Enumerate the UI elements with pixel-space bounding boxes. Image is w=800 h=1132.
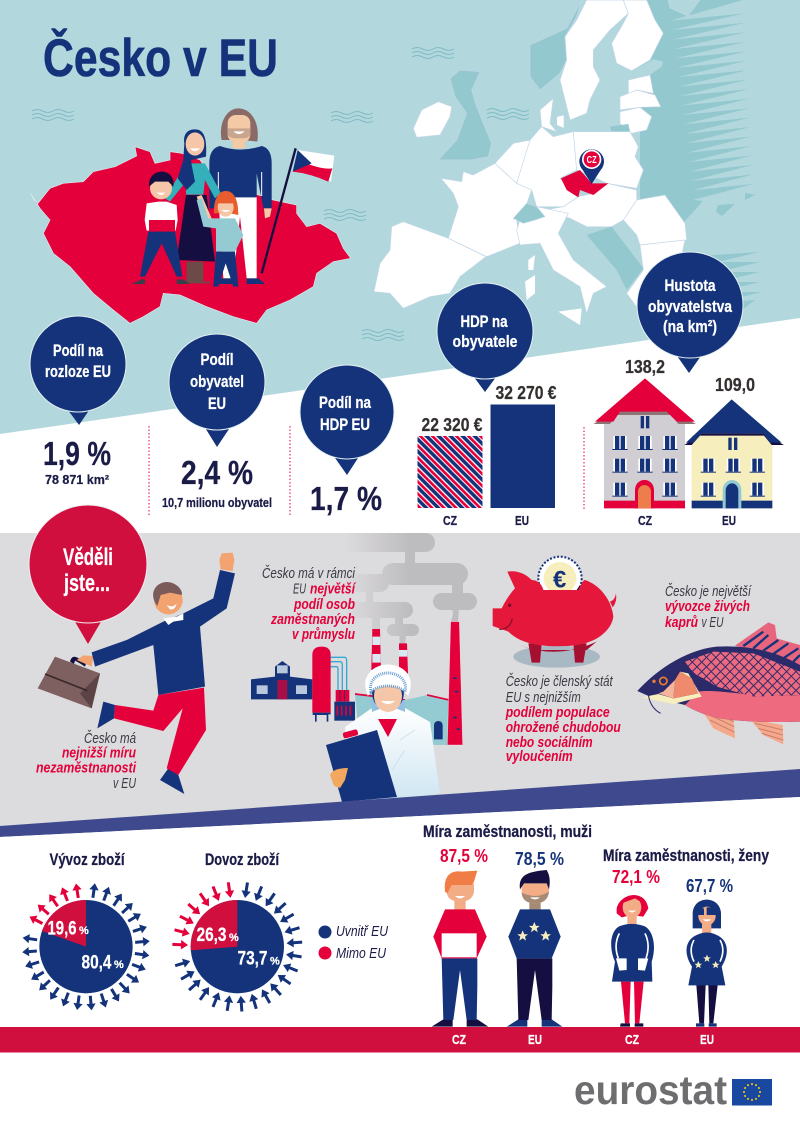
pie chart: import xyxy=(172,882,302,1012)
shoes xyxy=(97,702,115,728)
body xyxy=(493,571,613,646)
bar CZ xyxy=(418,436,482,508)
coin: € xyxy=(553,567,566,594)
bar label CZ men: CZ xyxy=(452,1032,466,1047)
Czechia shape xyxy=(31,147,351,323)
callout: share of EU area xyxy=(30,316,126,425)
coat xyxy=(345,708,440,800)
houses chart xyxy=(593,378,784,508)
import labels: 73,7 xyxy=(238,948,268,970)
map of Europe xyxy=(374,0,687,325)
Finland xyxy=(612,0,663,71)
text: poverty: podílem populace xyxy=(505,705,610,721)
France xyxy=(441,163,532,257)
value: area 1,9 %: 1,9 % xyxy=(43,435,111,472)
text: industry: Česko má v rámci xyxy=(262,565,356,582)
red arrows out xyxy=(27,883,83,928)
callout: population density xyxy=(637,252,743,373)
export labels: % xyxy=(79,925,89,937)
heading: export: Vývoz zboží xyxy=(50,851,126,869)
Gulf of Finland xyxy=(628,59,663,80)
house CZ xyxy=(593,378,696,508)
value 109,0: 109,0 xyxy=(715,375,755,395)
Germany xyxy=(517,127,578,207)
pie slices xyxy=(39,900,133,993)
Norway xyxy=(530,0,582,90)
map pin CZ xyxy=(579,149,604,184)
callout: GDP per capita xyxy=(437,283,533,392)
value: 78 871 km2: 78 871 km² xyxy=(45,472,110,487)
Switzerland xyxy=(513,203,545,223)
mother xyxy=(165,129,221,283)
value men CZ: 87,5 % xyxy=(440,845,488,866)
dotted dividers xyxy=(149,426,586,1022)
text: poverty: nebo sociálním xyxy=(506,735,593,751)
Italy xyxy=(517,207,607,313)
label EU density: EU xyxy=(722,513,736,528)
text: carp: kaprů xyxy=(665,615,698,631)
hand xyxy=(330,768,348,788)
scales xyxy=(685,652,800,697)
heading: import: Dovoz zboží xyxy=(205,851,280,869)
Ireland xyxy=(413,102,452,137)
smoke xyxy=(330,533,477,645)
red footer bar xyxy=(0,1027,800,1052)
heading: men employment: Míra zaměstnanosti, muži xyxy=(423,823,592,841)
import labels: 26,3 xyxy=(196,925,226,946)
jumping man xyxy=(38,553,235,794)
import labels xyxy=(196,925,280,970)
factory window xyxy=(434,721,443,739)
value: 10,7 million: 10,7 milionu obyvatel xyxy=(162,495,272,510)
Latvia xyxy=(620,90,661,110)
shadow xyxy=(513,646,600,668)
Estonia xyxy=(628,75,653,100)
legend: Uvnitř EU xyxy=(336,924,388,940)
label EU: EU xyxy=(515,513,529,528)
panel: did you know background xyxy=(0,533,800,835)
text: industry: v průmyslu xyxy=(292,627,355,643)
bar label EU men: EU xyxy=(528,1032,542,1047)
text: unemployment: nejnižší míru xyxy=(62,746,136,762)
text: unemployment: v EU xyxy=(113,776,136,792)
Western Balkans xyxy=(587,227,643,290)
text: industry xyxy=(262,565,357,643)
export labels: % xyxy=(114,959,124,971)
text: poverty: Česko je členský stát xyxy=(506,673,613,690)
Bulgaria and Greece xyxy=(627,240,685,312)
pie chart: export xyxy=(22,883,150,1011)
belly xyxy=(520,642,597,652)
tall chimney xyxy=(447,622,463,745)
man EU xyxy=(507,870,562,1027)
sea waves xyxy=(32,48,529,340)
import labels: % xyxy=(229,932,239,944)
worker woman xyxy=(326,665,440,802)
background: sea xyxy=(0,0,800,434)
text: poverty: ohrožené chudobou xyxy=(506,720,621,736)
dorsal fin xyxy=(735,622,800,665)
boy xyxy=(132,172,190,284)
import labels: % xyxy=(270,956,280,968)
text: industry: největší xyxy=(310,582,357,598)
title: Česko v EU xyxy=(43,27,278,88)
text: unemployment: Česko má xyxy=(84,730,136,747)
flag xyxy=(262,148,334,273)
Iberia xyxy=(374,222,486,308)
text: carp xyxy=(665,583,753,631)
blue diagonal band xyxy=(0,769,800,837)
fist xyxy=(219,553,234,571)
white below band xyxy=(0,797,800,1132)
text: poverty: EU s nejnižším xyxy=(506,690,581,706)
bar label CZ women: CZ xyxy=(625,1032,639,1047)
callout: GDP per capita: HDP na xyxy=(460,312,508,331)
head xyxy=(642,672,702,704)
callout: population density: Hustota xyxy=(664,276,716,295)
text: carp: vývozce živých xyxy=(665,599,750,615)
text: poverty: vyloučením xyxy=(506,749,573,765)
legend xyxy=(318,924,388,962)
Sweden xyxy=(560,0,628,120)
lower fins xyxy=(697,702,735,738)
hand left xyxy=(77,655,93,667)
text: poverty xyxy=(505,673,621,765)
head xyxy=(371,700,405,712)
woman EU xyxy=(687,900,727,1027)
callout: Věděli jste: jste... xyxy=(63,570,110,597)
label CZ density: CZ xyxy=(638,513,652,528)
export labels xyxy=(48,918,124,974)
export labels: 80,4 xyxy=(82,952,112,974)
Italian and Mediterranean islands xyxy=(525,255,582,325)
callout: share of EU population: Podíl xyxy=(200,350,234,369)
bar chart GDP per capita xyxy=(418,383,556,528)
map pin CZ: CZ xyxy=(587,155,597,166)
value EU: 32 270 € xyxy=(496,383,556,403)
callout: share of EU area: rozloze EU xyxy=(45,362,111,381)
Romania xyxy=(623,195,687,245)
value 138,2: 138,2 xyxy=(625,357,665,377)
callout: share of EU GDP: Podíl na xyxy=(319,393,371,412)
callout: share of EU population: obyvatel xyxy=(190,372,244,391)
woman CZ xyxy=(611,895,654,1027)
father xyxy=(209,108,272,284)
Czechia on map xyxy=(561,170,608,197)
Kaliningrad xyxy=(610,124,630,132)
eastern neighbours hatched xyxy=(640,0,761,315)
whisker xyxy=(648,695,661,713)
text: industry: EU xyxy=(293,582,306,598)
factory xyxy=(251,622,463,745)
United Kingdom xyxy=(438,70,492,160)
Benelux xyxy=(495,140,530,183)
slot xyxy=(538,585,584,592)
callout: share of EU population xyxy=(169,334,265,447)
tail xyxy=(610,593,616,607)
Lithuania xyxy=(620,107,652,133)
red arrows in xyxy=(172,882,235,950)
heading: women employment: Míra zaměstnanosti, ženy xyxy=(603,847,770,865)
clipboard xyxy=(326,730,397,802)
house EU xyxy=(684,399,784,508)
eye and smile xyxy=(508,604,511,607)
callout: Věděli jste xyxy=(29,505,147,644)
belly xyxy=(685,691,800,722)
legend: Mimo EU xyxy=(336,946,386,962)
callout: population density: (na km²) xyxy=(663,317,717,336)
collar xyxy=(163,613,183,625)
value men EU: 78,5 % xyxy=(515,848,564,869)
navy arrows out xyxy=(22,883,150,1011)
girl xyxy=(197,191,243,287)
callout: Věděli jste: Věděli xyxy=(63,544,113,571)
value: population 2,4 %: 2,4 % xyxy=(181,454,253,491)
text: carp: v EU xyxy=(702,615,724,631)
callout: population density: obyvatelstva xyxy=(648,297,732,316)
eye xyxy=(660,677,667,685)
text: carp: Česko je největší xyxy=(665,583,753,600)
bar label EU women: EU xyxy=(700,1032,714,1047)
head xyxy=(154,586,183,614)
navy arrows in xyxy=(174,882,302,1012)
pipes xyxy=(331,657,347,692)
man CZ xyxy=(432,871,488,1027)
White Sea outline xyxy=(668,0,700,16)
legs xyxy=(528,643,587,663)
Denmark xyxy=(540,98,564,132)
callout: share of EU GDP: HDP EU xyxy=(320,415,370,434)
body navy xyxy=(637,646,800,722)
value women CZ: 72,1 % xyxy=(612,866,660,887)
EU flag xyxy=(732,1079,772,1106)
callout: share of EU population: EU xyxy=(208,394,226,413)
value CZ: 22 320 € xyxy=(422,415,482,435)
callout: share of EU area: Podíl na xyxy=(53,341,103,360)
bar EU xyxy=(490,404,555,508)
machine xyxy=(336,690,349,702)
central Europe xyxy=(545,183,637,227)
label CZ: CZ xyxy=(443,513,457,528)
value: GDP 1,7 %: 1,7 % xyxy=(310,480,382,517)
text: unemployment xyxy=(36,730,137,792)
text: industry: podíl osob xyxy=(293,597,355,613)
callout: GDP per capita: obyvatele xyxy=(452,332,518,351)
hall xyxy=(251,661,312,699)
briefcase xyxy=(38,657,100,708)
text: unemployment: nezaměstnanosti xyxy=(36,760,137,776)
trousers xyxy=(114,688,206,775)
value women EU: 67,7 % xyxy=(686,875,733,896)
pie slices xyxy=(191,900,284,993)
eurostat wordmark: eurostat xyxy=(574,1067,727,1113)
carp xyxy=(637,622,800,744)
text: industry: zaměstnaných xyxy=(270,612,355,628)
teal back building xyxy=(355,694,449,745)
Poland xyxy=(573,132,643,188)
people figures xyxy=(432,870,727,1027)
callout: share of EU GDP xyxy=(300,365,394,475)
family on map of Czechia xyxy=(31,108,351,323)
striped chimneys xyxy=(371,629,381,670)
piggy bank xyxy=(493,557,616,668)
red tank xyxy=(312,647,331,713)
sweater xyxy=(92,570,235,695)
export labels: 19,6 xyxy=(48,918,76,940)
